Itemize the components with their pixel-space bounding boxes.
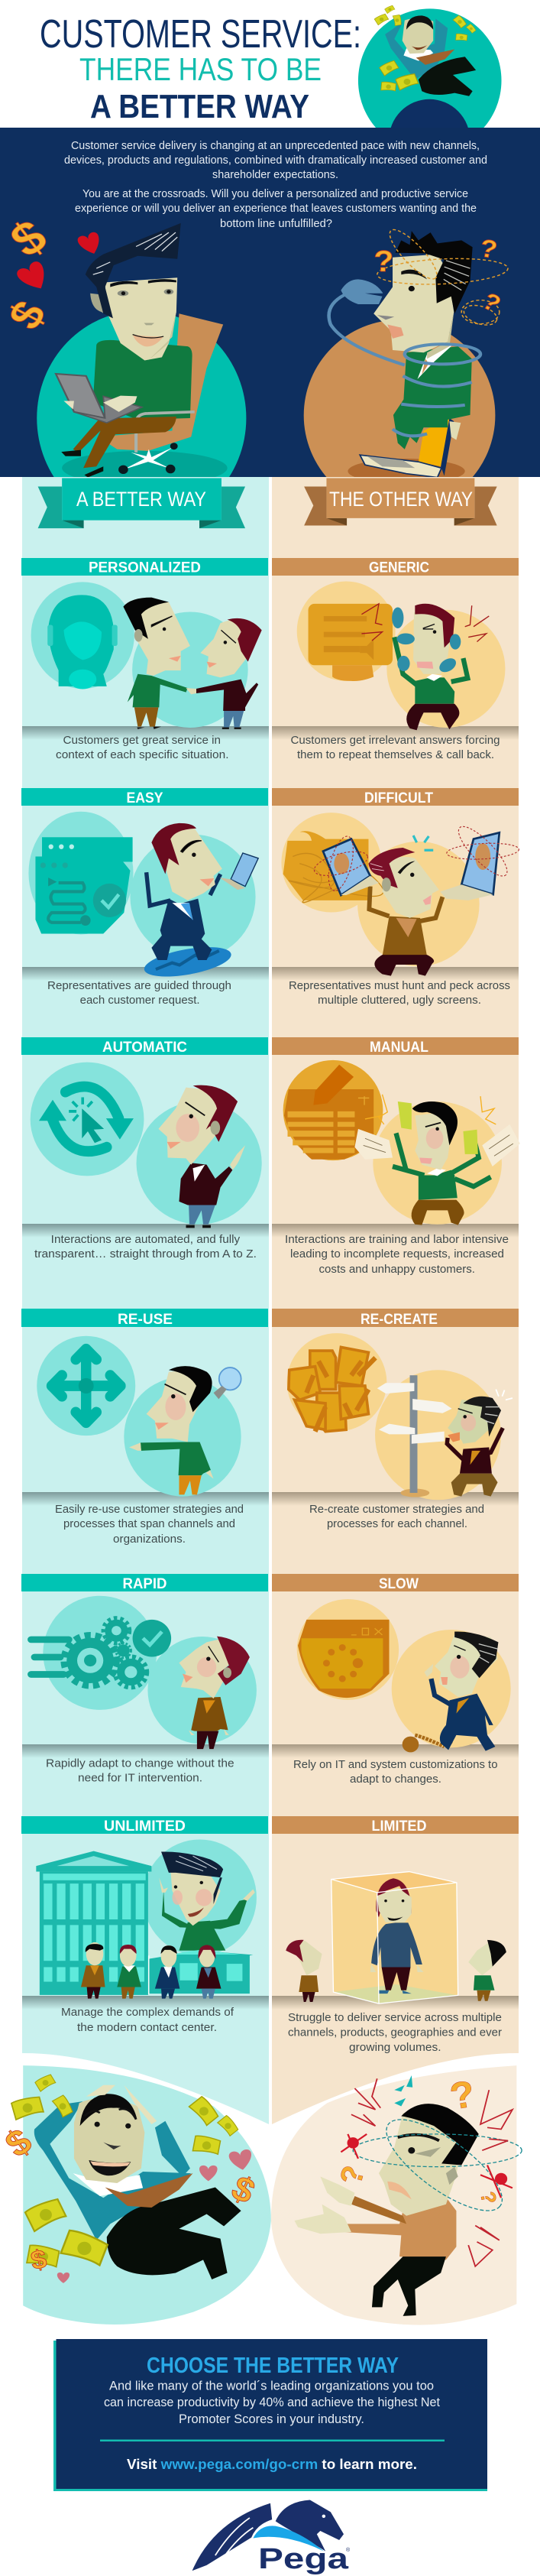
illustration: re-create, documents and signpost xyxy=(287,1333,513,1500)
header bars: PERSONALIZED xyxy=(89,560,201,576)
illustration: angry man with skulls: ? xyxy=(476,2190,501,2205)
header bars: UNLIMITED xyxy=(104,1818,186,1835)
description text: adapt to changes. xyxy=(350,1773,441,1786)
header bars xyxy=(21,558,519,1835)
description text xyxy=(34,734,510,2054)
description text: Interactions are training and labor intensive xyxy=(285,1233,509,1246)
panel: navy intro band xyxy=(0,128,540,477)
illustration: frustrated man tangled in cable: ? xyxy=(477,235,500,264)
illustration: manual, man juggling paperwork xyxy=(283,1060,520,1225)
description text: leading to incomplete requests, increased xyxy=(290,1247,504,1260)
illustration: happy man with laptop: $ xyxy=(0,209,57,268)
description text: Rapidly adapt to change without the xyxy=(46,1757,234,1770)
description text: each customer request. xyxy=(80,994,200,1007)
title xyxy=(40,12,361,125)
intro text xyxy=(64,139,487,230)
logo: Pega: ® xyxy=(346,2547,351,2553)
callout: choose the better way: Visit www.pega.com/go-crm to learn more. xyxy=(127,2457,417,2472)
illustration: angry man with skulls xyxy=(271,2065,522,2325)
description text: Re-create customer strategies and xyxy=(309,1503,484,1516)
description text: Easily re-use customer strategies and xyxy=(55,1503,244,1516)
header bars: MANUAL xyxy=(370,1040,428,1056)
description text: growing volumes. xyxy=(349,2041,441,2054)
description text: need for IT intervention. xyxy=(78,1772,202,1784)
illustration: happy man floating in money: $ xyxy=(226,2168,261,2211)
illustration: easy, man surfing with laptop xyxy=(28,812,258,982)
callout: choose the better way: can increase productivity by 40% and achieve the highest Net xyxy=(104,2395,440,2409)
callout: choose the better way: And like many of the world´s leading organizations you too xyxy=(109,2379,434,2393)
description text: Interactions are automated, and fully xyxy=(51,1233,241,1246)
illustration: slow, loading window and chained man xyxy=(297,1599,511,1752)
illustration: difficult, man with two laptops xyxy=(281,813,519,976)
description text: multiple cluttered, ugly screens. xyxy=(318,994,481,1007)
illustration: generic, man with four phones xyxy=(297,582,505,730)
description text: Struggle to deliver service across multiple xyxy=(288,2011,502,2024)
intro text: experience or will you deliver an experience that leaves customers wanting and the xyxy=(75,202,477,215)
description text: Customers get irrelevant answers forcing xyxy=(290,734,500,747)
description text: Rely on IT and system customizations to xyxy=(293,1758,498,1771)
ribbon: The Other Way xyxy=(304,479,497,526)
panel: left column A Better Way background xyxy=(22,477,269,2124)
description text: organizations. xyxy=(113,1533,186,1546)
header bars: GENERIC xyxy=(369,560,429,576)
title: THERE HAS TO BE xyxy=(79,51,322,87)
header bars: DIFFICULT xyxy=(364,790,433,806)
illustration: re-use, arrows and man with bulb xyxy=(37,1336,241,1497)
intro text: devices, products and regulations, combined with dramatically increased customer and xyxy=(64,154,487,167)
illustration: happy man with laptop: $ xyxy=(0,294,57,337)
description text: channels, products, geographies and ever xyxy=(288,2026,502,2039)
header bars: LIMITED xyxy=(371,1818,426,1835)
callout: choose the better way: CHOOSE THE BETTER WAY xyxy=(147,2354,399,2378)
icon: falling man in top circle xyxy=(358,5,502,182)
illustration: happy man floating in money: $ xyxy=(28,2244,49,2276)
intro text: shareholder expectations. xyxy=(212,168,338,181)
illustration: limited, man in a box xyxy=(286,1872,506,2003)
description text: Representatives are guided through xyxy=(47,979,231,992)
logo: Pega: Pega xyxy=(258,2543,349,2575)
header bars: SLOW xyxy=(379,1576,419,1592)
description text: costs and unhappy customers. xyxy=(319,1263,475,1276)
description text: processes for each channel. xyxy=(327,1517,467,1530)
illustration: personalized handshake xyxy=(31,582,262,729)
header bars: EASY xyxy=(127,790,163,806)
logo: Pega xyxy=(192,2500,351,2575)
title: CUSTOMER SERVICE: xyxy=(40,12,361,57)
ribbon: The Other Way: THE OTHER WAY xyxy=(329,488,473,511)
ribbon: A Better Way xyxy=(38,479,245,528)
intro text: You are at the crossroads. Will you deliver a personalized and productive service xyxy=(82,187,468,200)
callout: choose the better way: Promoter Scores in your industry. xyxy=(179,2412,364,2426)
header bars: RE-CREATE xyxy=(361,1312,438,1328)
description text: Manage the complex demands of xyxy=(61,2006,234,2019)
illustration: unlimited, building, big man and four reps xyxy=(36,1839,257,1999)
illustration: happy man with laptop xyxy=(0,209,246,526)
panel: right column The Other Way background xyxy=(272,477,519,2124)
illustration: rapid, gears and man xyxy=(31,1596,257,1749)
description text: context of each specific situation. xyxy=(56,748,229,761)
illustration: angry man with skulls: ? xyxy=(447,2072,478,2117)
illustration: angry man with skulls: ? xyxy=(333,2162,372,2188)
ribbon: A Better Way: A BETTER WAY xyxy=(76,488,206,511)
description text: processes that span channels and xyxy=(63,1517,235,1530)
ground shadows xyxy=(22,726,519,2010)
intro text: Customer service delivery is changing at an unprecedented pace with new channels, xyxy=(71,139,480,152)
illustration: frustrated man tangled in cable: ? xyxy=(373,245,393,278)
description text: the modern contact center. xyxy=(77,2021,217,2034)
description text: Representatives must hunt and peck across xyxy=(289,979,510,992)
description text: Customers get great service in xyxy=(63,734,221,747)
illustration: frustrated man tangled in cable xyxy=(304,225,509,511)
header bars: RE-USE xyxy=(118,1312,173,1328)
header bars: AUTOMATIC xyxy=(102,1040,187,1056)
description text: them to repeat themselves & call back. xyxy=(297,748,494,761)
illustration: frustrated man tangled in cable: ? xyxy=(477,287,506,317)
illustration: automatic, cycle icon and man xyxy=(31,1063,262,1228)
illustration: happy man floating in money xyxy=(0,2065,271,2325)
header bars: RAPID xyxy=(122,1576,167,1592)
callout: choose the better way xyxy=(53,2339,487,2491)
intro text: bottom line unfulfilled? xyxy=(220,217,332,230)
description text: transparent… straight through from A to Z. xyxy=(34,1247,257,1260)
title: A BETTER WAY xyxy=(90,88,309,125)
